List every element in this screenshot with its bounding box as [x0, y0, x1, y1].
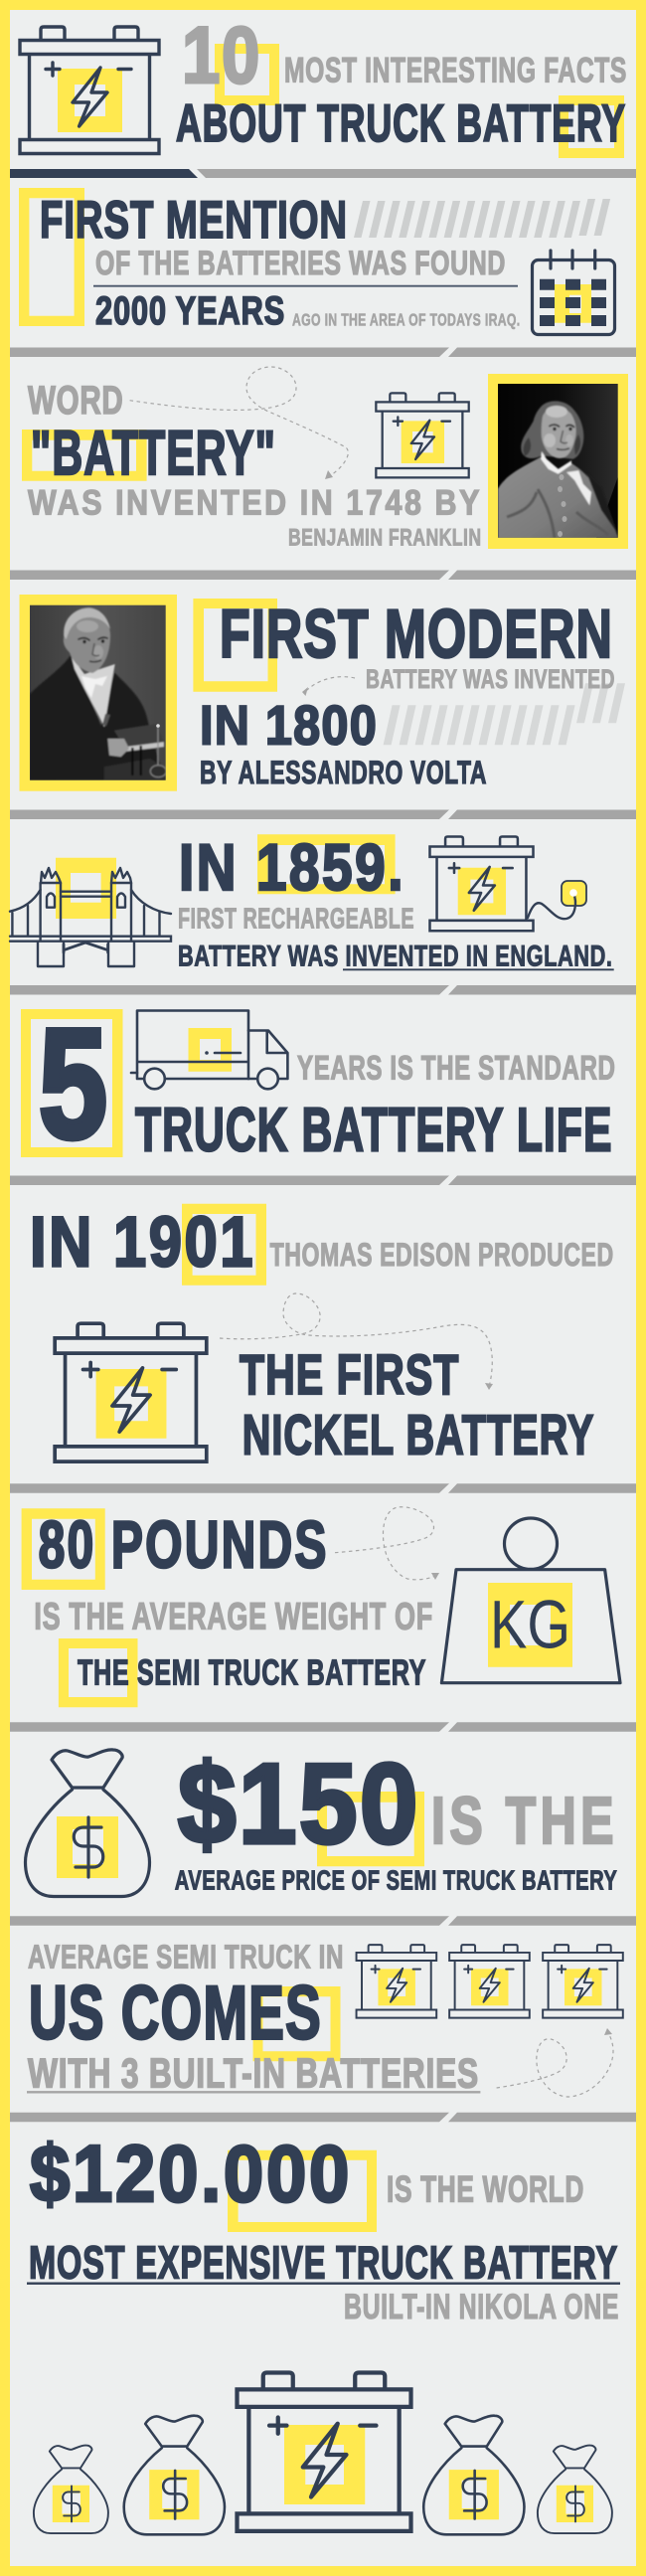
icon: battery: [376, 393, 469, 477]
highlight frame: [182, 1204, 266, 1286]
icon: kg weight: [441, 1518, 620, 1683]
icon: kg weight: KG: [490, 1587, 570, 1663]
icon: battery: [20, 27, 159, 153]
icon: money bag: [26, 1750, 149, 1897]
subheading: WITH 3 BUILT-IN BATTERIES: [28, 2050, 479, 2097]
highlight frame: [22, 429, 147, 481]
heading line one: THE FIRST: [240, 1343, 459, 1407]
highlight frame behind battery: [559, 95, 624, 158]
panel: 1901 edison: [30, 1204, 614, 1467]
text: word: WORD: [28, 379, 123, 423]
name: BY ALESSANDRO VOLTA: [200, 755, 487, 790]
photo: alessandro volta: [20, 595, 177, 791]
icon: battery with plug: [429, 836, 586, 931]
location note: AGO IN THE AREA OF TODAYS IRAQ.: [292, 309, 521, 329]
panel: title: [20, 11, 627, 158]
highlight frame: [228, 2150, 377, 2232]
highlight frame: [19, 188, 84, 326]
panel: 1859 england: [10, 831, 614, 973]
panel: five years: [21, 997, 616, 1171]
text: semi truck battery: THE SEMI TRUCK BATTERY: [78, 1652, 426, 1692]
arrow: dashed: [302, 677, 355, 696]
panel: word battery: [22, 367, 628, 552]
heading: IN 1859.: [179, 831, 405, 904]
subheading: IS THE AVERAGE WEIGHT OF: [34, 1597, 433, 1638]
icon: calendar: [533, 251, 614, 334]
hatch stripes: [384, 683, 625, 745]
highlight frame: [21, 1009, 123, 1157]
panel: price: [26, 1741, 618, 1897]
highlight frame: [59, 1638, 137, 1707]
highlight frame: [253, 1986, 340, 2061]
arrow: dashed: [130, 367, 348, 479]
highlight frame: [317, 1792, 424, 1866]
icon: large battery: [237, 2372, 411, 2531]
highlight frame: [193, 599, 277, 692]
panel: most expensive: [27, 2130, 620, 2534]
highlight frame behind 10: [215, 44, 279, 105]
price: $120.000: [30, 2130, 352, 2219]
hatch stripes: [354, 199, 610, 238]
icon: battery one: [357, 1945, 436, 2018]
heading: battery: "BATTERY": [31, 419, 276, 488]
icon: battery three: [543, 1945, 623, 2018]
icon: battery two: [449, 1945, 530, 2018]
photo: benjamin franklin: [488, 374, 628, 549]
heading: US COMES: [29, 1972, 322, 2056]
panel: 80 pounds: [22, 1507, 620, 1707]
arrow: dashed: [220, 1293, 493, 1390]
heading: FIRST MENTION: [40, 191, 348, 250]
icon: medium money bag left: [124, 2416, 225, 2534]
highlight frame: [22, 1508, 105, 1590]
year: IN 1800: [200, 694, 378, 756]
panel: first mention: [19, 188, 614, 334]
text: average semi truck: AVERAGE SEMI TRUCK IN: [28, 1939, 344, 1976]
title number: 10: [182, 11, 261, 100]
number five: 5: [39, 997, 107, 1171]
panel: three batteries: [27, 1939, 623, 2097]
arrow: dashed: [335, 1507, 439, 1580]
text: invented in 1748: WAS INVENTED IN 1748 BY: [28, 483, 482, 523]
heading: 80 POUNDS: [39, 1508, 329, 1583]
panel: first modern battery: [20, 595, 625, 791]
icon: truck: [131, 1010, 287, 1089]
icon: battery: [55, 1323, 207, 1461]
icon: small money bag right: [538, 2446, 612, 2533]
subheading: FIRST RECHARGEABLE: [178, 904, 414, 936]
arrow: dashed: [497, 2028, 613, 2097]
icon: tower bridge: [10, 858, 171, 966]
price: $150: [178, 1741, 420, 1867]
text: benjamin franklin: BENJAMIN FRANKLIN: [288, 525, 481, 552]
years: 2000 YEARS: [95, 289, 285, 333]
icon: medium money bag right: [423, 2416, 524, 2534]
highlight frame: [257, 834, 396, 894]
icon: small money bag left: [34, 2446, 108, 2533]
heading: IN 1901: [30, 1204, 255, 1283]
